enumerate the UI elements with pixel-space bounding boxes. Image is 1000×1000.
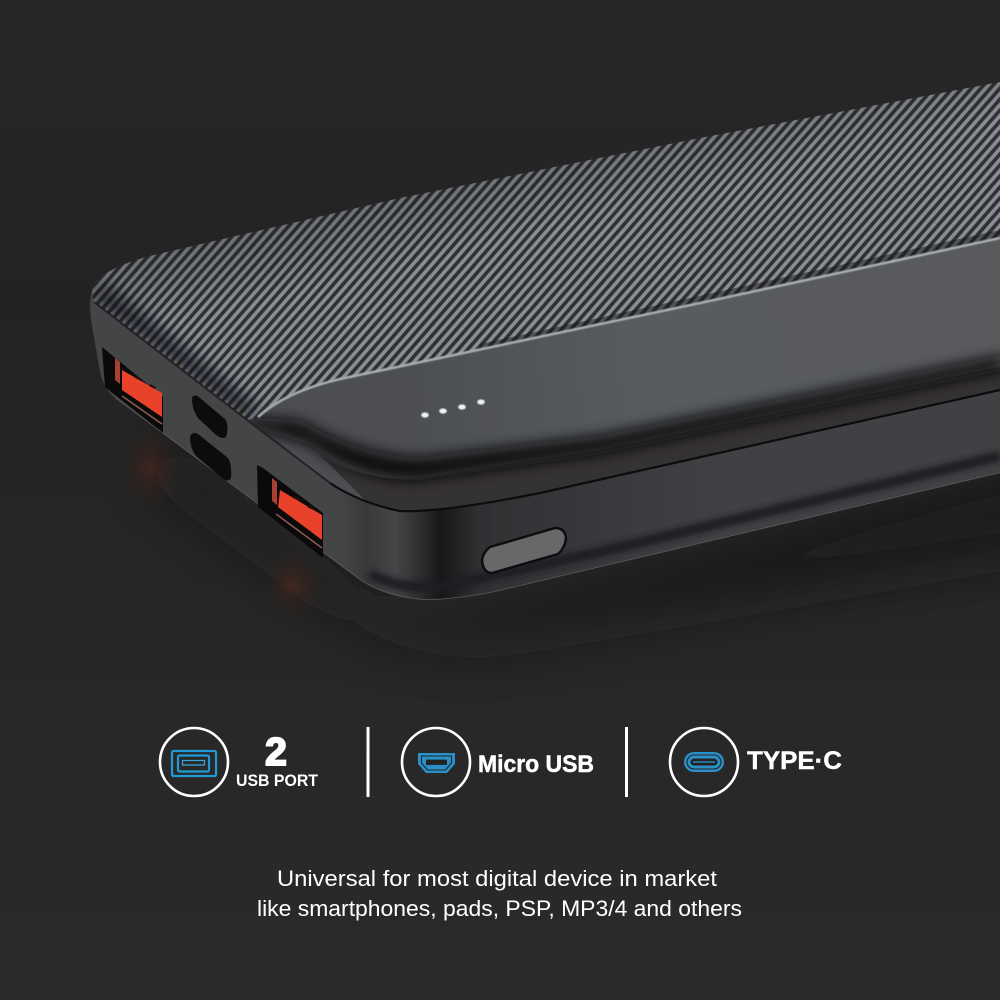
device shadow on the table: [160, 400, 1000, 642]
power bank: [80, 70, 1000, 610]
Micro USB port: [190, 433, 231, 480]
carbon fibre texture: [80, 70, 1000, 430]
divider: [366, 727, 370, 797]
description text: like smartphones, pads, PSP, MP3/4 and others: [257, 896, 742, 921]
description text: Universal for most digital device in market: [277, 866, 717, 891]
right USB port: [257, 465, 323, 558]
feature: Micro USB: [402, 728, 594, 796]
feature: Type-C: [670, 728, 842, 796]
label: Micro USB: Micro USB: [478, 751, 594, 778]
highlight ridge: [258, 238, 1000, 417]
icon: Type-C port: [670, 728, 738, 796]
red port reflections: [120, 428, 322, 619]
smooth top panel: [94, 230, 1000, 500]
left USB port: [102, 347, 163, 433]
side face: [490, 391, 1000, 592]
icon: Micro USB port: [402, 728, 470, 796]
power button: [482, 528, 566, 573]
dark shading band: [240, 360, 1000, 476]
label: TYPE-C: TYPE·C: [747, 747, 842, 775]
Type-C port: [192, 396, 228, 438]
seam line: [330, 390, 1000, 511]
strip between shadow and seam: [320, 367, 1000, 515]
LED indicator dots: [421, 399, 485, 418]
icon: USB port: [160, 728, 228, 796]
description text: [257, 866, 742, 921]
label: 2 USB PORT: [236, 731, 318, 790]
dark lower edge strip: [370, 456, 1000, 587]
infographic canvas: [90, 82, 1000, 920]
label: 2 USB PORT: USB PORT: [236, 772, 318, 790]
feature: 2 USB port: [160, 728, 318, 796]
divider: [625, 727, 628, 797]
label: 2 USB PORT: 2: [265, 731, 287, 774]
